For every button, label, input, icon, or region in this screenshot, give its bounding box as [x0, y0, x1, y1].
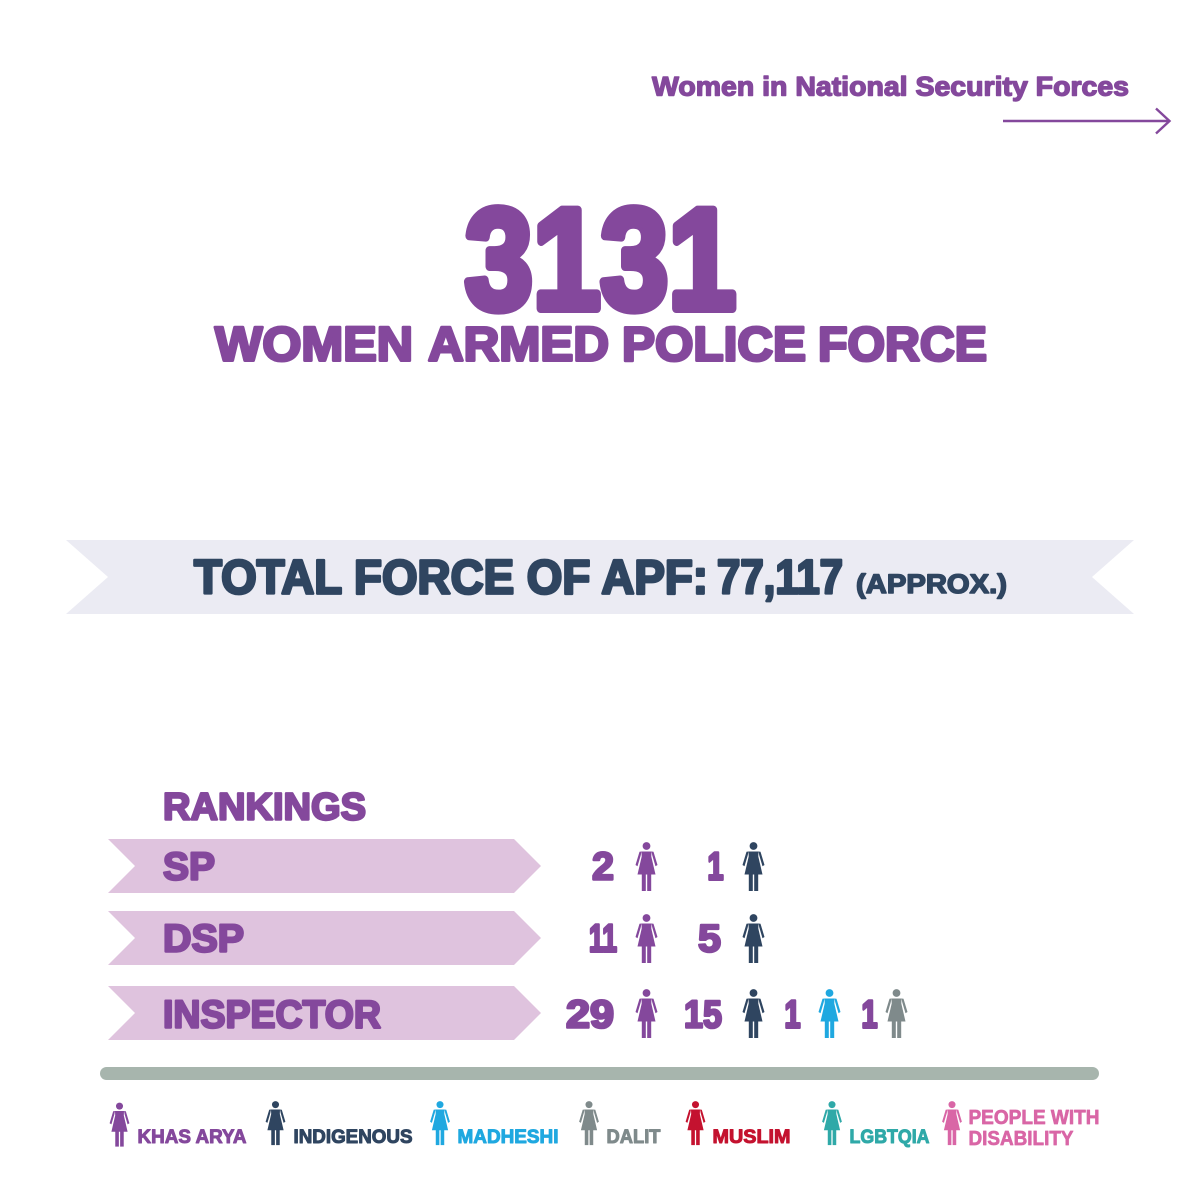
- banner: total force of APF: [66, 540, 1134, 614]
- arrow: [1003, 108, 1170, 134]
- count: khas arya: 11: [589, 918, 617, 960]
- icon: indigenous woman: [742, 989, 764, 1038]
- legend item: khas arya: KHAS ARYA: [138, 1126, 246, 1148]
- rank label: INSPECTOR: [163, 994, 381, 1036]
- subtitle: women armed police force: FORCE: [818, 318, 987, 372]
- icon: madheshi woman: [818, 989, 840, 1038]
- count: khas arya: 29: [566, 994, 614, 1036]
- ribbon shape: [66, 540, 1134, 614]
- subtitle: women armed police force: POLICE: [622, 318, 806, 372]
- icon: dalit woman: [886, 989, 908, 1038]
- rank label: DSP: [163, 918, 244, 960]
- count: dalit: 1: [862, 994, 878, 1036]
- legend item: muslim: [686, 1101, 790, 1148]
- count: indigenous: 5: [698, 918, 721, 960]
- subtitle: women armed police force: [215, 318, 987, 372]
- divider bar: [100, 1067, 1099, 1080]
- rank label: SP: [163, 846, 215, 888]
- legend item: people with disability: PEOPLE WITH: [968, 1107, 1100, 1129]
- headline number: 3131: 3131: [465, 180, 736, 340]
- legend item: indigenous: [266, 1101, 412, 1148]
- rank ribbon: [108, 986, 541, 1040]
- icon: khas arya woman: [636, 914, 658, 963]
- rank row: inspector: [108, 986, 908, 1040]
- rank row: SP: [108, 839, 764, 893]
- legend item: khas arya: [110, 1103, 246, 1148]
- legend item: madheshi: MADHESHI: [458, 1126, 558, 1148]
- subtitle: women armed police force: ARMED: [428, 318, 609, 372]
- subtitle: women armed police force: WOMEN: [215, 318, 413, 372]
- legend item: dalit: [579, 1101, 661, 1148]
- count: madheshi: 1: [784, 994, 800, 1036]
- legend item: lgbtqia: LGBTQIA: [850, 1126, 930, 1148]
- total force text: 77,117: [717, 552, 843, 604]
- icon: khas arya woman: [636, 989, 658, 1038]
- count: indigenous: 15: [684, 994, 722, 1036]
- count: khas arya: 2: [592, 846, 614, 888]
- legend item: lgbtqia: [822, 1101, 930, 1148]
- legend item: madheshi: [430, 1101, 558, 1148]
- legend: [110, 1101, 1100, 1150]
- legend item: indigenous: INDIGENOUS: [294, 1126, 412, 1148]
- legend item: muslim: MUSLIM: [712, 1126, 790, 1148]
- legend item: dalit: DALIT: [606, 1126, 661, 1148]
- rank row: DSP: [108, 911, 764, 965]
- count: indigenous: 1: [708, 846, 724, 888]
- icon: indigenous woman: [742, 914, 764, 963]
- rank ribbon: [108, 911, 541, 965]
- total force text: TOTAL FORCE OF APF:: [194, 552, 708, 604]
- icon: khas arya woman: [636, 842, 658, 891]
- rank ribbon: [108, 839, 541, 893]
- icon: indigenous woman: [742, 842, 764, 891]
- approx note: (APPROX.): [856, 569, 1007, 599]
- rankings heading: RANKINGS: [163, 786, 366, 828]
- legend item: people with disability: DISABILITY: [968, 1128, 1074, 1150]
- legend item: people with disability: [942, 1101, 1100, 1150]
- section heading: Women in National Security Forces: Women in National Security Forces: [652, 72, 1129, 102]
